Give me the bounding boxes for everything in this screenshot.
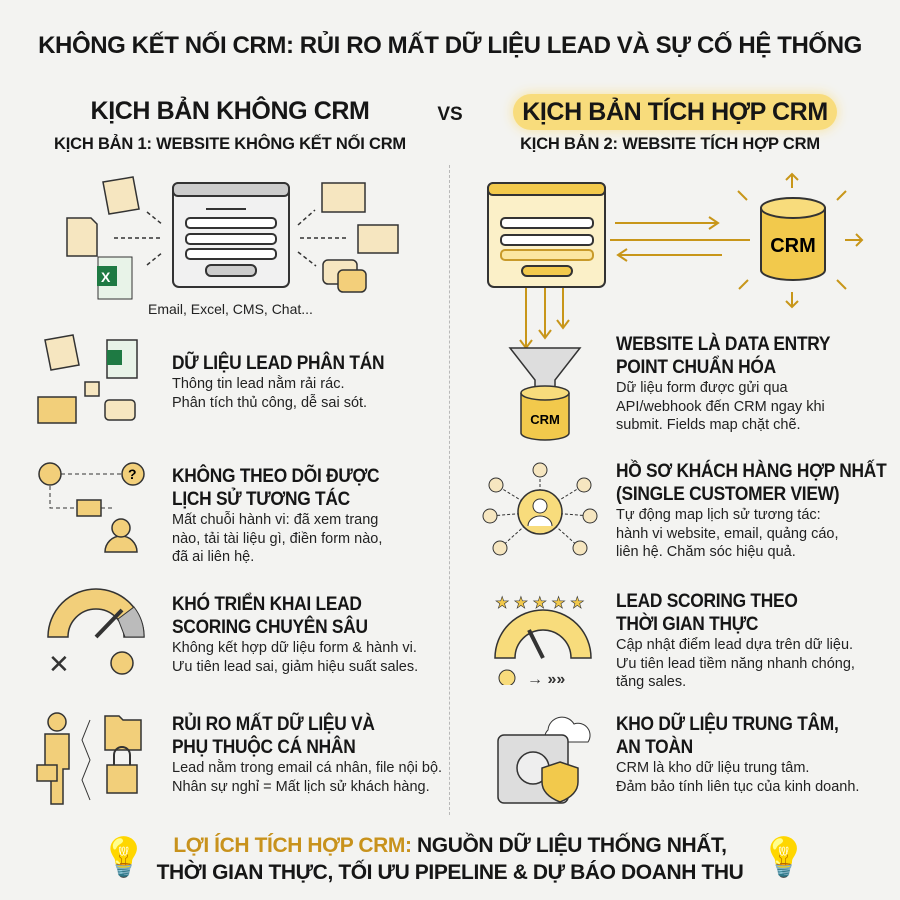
block: Lead scoring realtime: Cập nhật điểm lead dựa trên dữ liệu.	[616, 637, 853, 653]
block: Hồ sơ khách hàng	[616, 460, 887, 560]
diagram: right integrated flow	[487, 172, 864, 441]
block: Website data entry: Dữ liệu form được gửi qua	[616, 380, 788, 396]
block: Không theo dõi: LỊCH SỬ TƯƠNG TÁC	[172, 488, 350, 510]
block: Website data entry: API/webhook đến CRM ngay khi	[616, 398, 825, 414]
subtitle left: KỊCH BẢN 1: WEBSITE KHÔNG KẾT NỐI CRM	[54, 135, 406, 153]
block: Rủi ro mất dữ liệu: PHỤ THUỘC CÁ NHÂN	[172, 736, 355, 758]
block: Dữ liệu lead phân tán	[172, 352, 384, 410]
block: Kho dữ liệu trung tâm: CRM là kho dữ liệu trung tâm.	[616, 760, 809, 776]
diagram: right integrated flow: CRM	[530, 412, 560, 427]
title: KHÔNG KẾT NỐI CRM: RỦI RO MẤT DỮ LIỆU LEAD VÀ SỰ CỐ HỆ THỐNG	[38, 32, 862, 59]
block: Không theo dõi: nào, tải tài liệu gì, điền form nào,	[172, 530, 382, 546]
divider dashed	[449, 165, 450, 815]
block: Dữ liệu lead phân tán: DỮ LIỆU LEAD PHÂN TÁN	[172, 352, 384, 374]
block: Website data entry: POINT CHUẨN HÓA	[616, 356, 776, 378]
block: Không theo dõi	[172, 464, 382, 565]
block: Website data entry: WEBSITE LÀ DATA ENTRY	[616, 333, 830, 355]
footer benefit	[156, 832, 743, 884]
block: Dữ liệu lead phân tán: Phân tích thủ công, dễ sai sót.	[172, 394, 367, 410]
diagram: left scattered sources	[66, 176, 399, 317]
block: Lead scoring realtime: LEAD SCORING THEO	[616, 590, 798, 612]
block: Lead scoring: Không kết hợp dữ liệu form & hành vi.	[172, 640, 417, 656]
icon: bulb right: 💡	[760, 837, 807, 879]
icon: tracking lost: ?	[128, 466, 137, 482]
block: Kho dữ liệu trung tâm	[616, 712, 859, 794]
block: Website data entry: submit. Fields map chặt chẽ.	[616, 417, 801, 433]
icon: scattered data	[37, 334, 138, 424]
footer benefit: LỢI ÍCH TÍCH HỢP CRM: NGUỒN DỮ LIỆU THỐNG NHẤT,	[173, 834, 727, 857]
diagram: right integrated flow: CRM	[770, 235, 816, 257]
block: Hồ sơ khách hàng: liên hệ. Chăm sóc hiệu quả.	[616, 544, 796, 560]
icon: gauge with stars: ★ ★ ★ ★ ★	[495, 595, 584, 612]
icon: single customer view	[482, 462, 598, 556]
subtitle right: KỊCH BẢN 2: WEBSITE TÍCH HỢP CRM	[520, 135, 820, 153]
block: Rủi ro mất dữ liệu: Nhân sự nghỉ = Mất lịch sử khách hàng.	[172, 778, 430, 794]
icon: tracking lost	[38, 462, 145, 553]
icon: gauge broken: ✕	[48, 649, 70, 679]
block: Lead scoring realtime	[616, 590, 855, 690]
block: Hồ sơ khách hàng: hành vi website, email, quảng cáo,	[616, 526, 838, 542]
block: Hồ sơ khách hàng: (SINGLE CUSTOMER VIEW)	[616, 483, 839, 505]
block: Lead scoring	[172, 592, 418, 674]
block: Rủi ro mất dữ liệu: RỦI RO MẤT DỮ LIỆU VÀ	[172, 713, 375, 735]
block: Không theo dõi: KHÔNG THEO DÕI ĐƯỢC	[172, 465, 379, 487]
block: Kho dữ liệu trung tâm: KHO DỮ LIỆU TRUNG TÂM,	[616, 713, 839, 735]
block: Dữ liệu lead phân tán: Thông tin lead nằm rải rác.	[172, 376, 344, 392]
footer benefit: THỜI GIAN THỰC, TỐI ƯU PIPELINE & DỰ BÁO DOANH THU	[157, 861, 743, 884]
block: Lead scoring realtime: tăng sales.	[616, 674, 686, 690]
icon: safe vault	[497, 716, 591, 804]
block: Không theo dõi: đã ai liên hệ.	[172, 549, 254, 565]
block: Kho dữ liệu trung tâm: AN TOÀN	[616, 736, 693, 758]
block: Lead scoring realtime: THỜI GIAN THỰC	[616, 613, 758, 635]
heading: right scenario: KỊCH BẢN TÍCH HỢP CRM	[522, 98, 828, 126]
icon: bulb left: 💡	[100, 837, 147, 879]
icon: gauge broken	[47, 588, 145, 679]
block: Hồ sơ khách hàng: Tự động map lịch sử tương tác:	[616, 507, 821, 523]
block: Lead scoring realtime: Ưu tiên lead tiềm năng nhanh chóng,	[616, 656, 855, 672]
heading: left scenario: KỊCH BẢN KHÔNG CRM	[91, 97, 369, 125]
block: Lead scoring: Ưu tiên lead sai, giảm hiệu suất sales.	[172, 658, 418, 674]
diagram: left scattered sources: Email, Excel, CMS, Chat...	[148, 301, 313, 317]
block: Không theo dõi: Mất chuỗi hành vi: đã xem trang	[172, 512, 378, 528]
vs label: VS	[437, 104, 463, 125]
block: Kho dữ liệu trung tâm: Đảm bảo tính liên tục của kinh doanh.	[616, 778, 859, 794]
icon: gauge with stars	[494, 595, 592, 685]
block: Rủi ro mất dữ liệu	[172, 712, 442, 794]
block: Website data entry	[616, 332, 830, 433]
block: Hồ sơ khách hàng: HỒ SƠ KHÁCH HÀNG HỢP NHẤT	[616, 460, 886, 482]
diagram: left scattered sources: X	[101, 269, 111, 285]
block: Lead scoring: KHÓ TRIỂN KHAI LEAD	[172, 593, 362, 615]
icon: person leaving	[36, 712, 142, 805]
block: Rủi ro mất dữ liệu: Lead nằm trong email cá nhân, file nội bộ.	[172, 760, 442, 776]
block: Lead scoring: SCORING CHUYÊN SÂU	[172, 616, 368, 638]
